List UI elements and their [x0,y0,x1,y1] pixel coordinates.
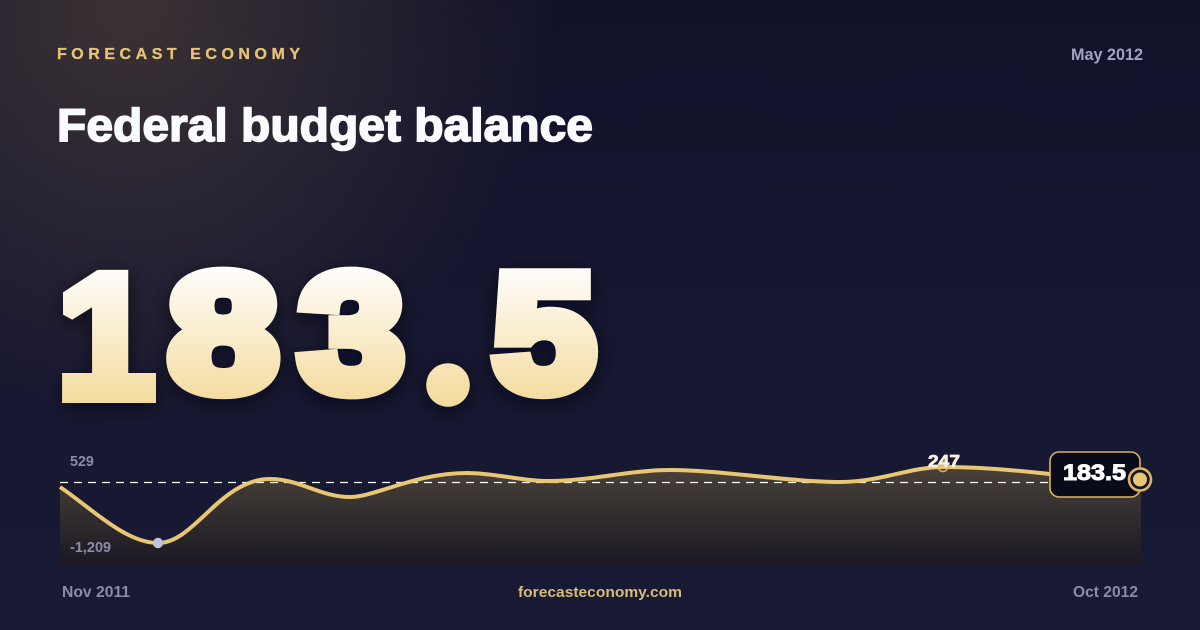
big value: 5 [493,240,595,425]
end point marker [1129,468,1151,490]
brand label: FORECAST ECONOMY [57,46,300,63]
high point marker [938,462,948,472]
low point marker [153,538,163,548]
date label: May 2012 [1071,46,1143,64]
big value [57,239,595,435]
area fill [60,467,1141,565]
big value: 3 [300,240,404,426]
big value: . [425,252,469,431]
current value badge [1050,452,1140,497]
area chart [60,451,1151,565]
trend line [60,467,1140,543]
reference dashed line [60,482,1050,484]
max label: 529 [70,454,94,470]
title: Federal budget balance [57,99,593,151]
current value badge: 183.5 [1063,460,1126,485]
high point label: 247 [928,451,960,471]
start date: Nov 2011 [62,584,130,601]
big value: 1 [57,239,155,435]
big value: 8 [169,241,278,426]
end date: Oct 2012 [1073,584,1138,601]
website: forecasteconomy.com [518,584,682,601]
min label: -1,209 [70,540,111,556]
